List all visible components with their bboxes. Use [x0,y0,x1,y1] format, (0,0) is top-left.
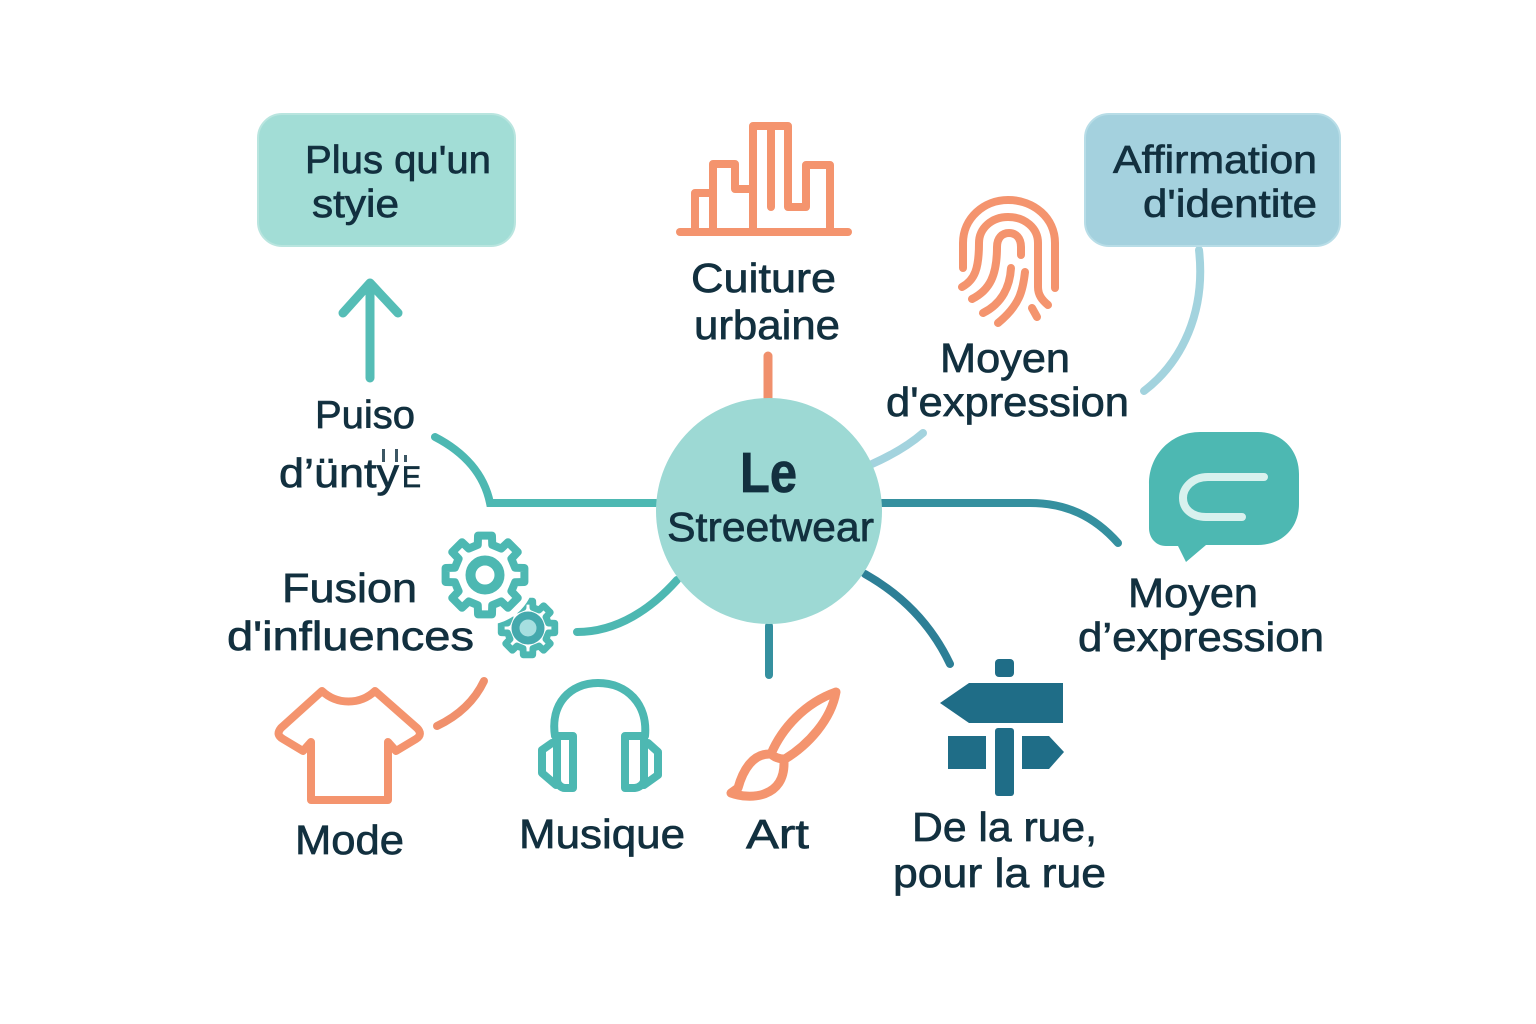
label: Culture urbaine [691,255,840,348]
label: Puiso d'untye: d’ünty [279,450,400,496]
panel: Plus qu'un style: styie [312,183,399,226]
label: Moyen d'expression top: d'expression [886,379,1129,425]
icon: fingerprint [962,200,1055,323]
panel: Plus qu'un style [258,114,515,246]
icon: speech bubble [1149,432,1299,562]
icon: t-shirt [279,691,420,800]
label: Fusion d'influences: Fusion [282,565,417,611]
central node: Le Streetwear: Streetwear [667,504,874,550]
icon: signpost [940,659,1064,796]
icon: paintbrush [731,692,836,796]
central node: Le Streetwear [656,398,882,624]
central node: Le Streetwear: Le [740,441,797,505]
icon: headphones [542,683,658,788]
label: Culture urbaine: Cuiture [691,255,836,301]
panel: Affirmation d'identite [1085,114,1340,246]
label: Puiso d'untye: E [402,461,421,494]
label: Moyen d'expression right [1078,570,1324,660]
panel: Affirmation d'identite: d'identite [1143,183,1317,226]
label: Puiso d'untye: Puiso [315,394,415,437]
label: De la rue, pour la rue: pour la rue [893,850,1106,896]
label: Culture urbaine: urbaine [694,302,840,348]
label: Moyen d'expression right: d’expression [1078,614,1324,660]
icon: city skyline [680,126,848,232]
panel: Affirmation d'identite: Affirmation [1113,139,1317,182]
label: Fusion d'influences: d'influences [227,613,474,659]
label: Moyen d'expression right: Moyen [1128,570,1258,616]
panel: Plus qu'un style: Plus qu'un [305,139,491,182]
label: Musique: Musique [519,811,685,857]
label: Moyen d'expression top: Moyen [940,335,1070,381]
label: De la rue, pour la rue [893,804,1106,896]
label: Mode: Mode [295,817,404,863]
icon: small gear [435,525,555,655]
arrow: up [343,283,398,378]
label: Art: Art [746,811,810,857]
label: Fusion d'influences [227,565,474,659]
connector lines [435,250,1200,726]
label: Moyen d'expression top [886,335,1129,425]
label: De la rue, pour la rue: De la rue, [912,804,1097,850]
label: Puiso d'untye [279,394,421,496]
icon: big gear [446,536,524,614]
